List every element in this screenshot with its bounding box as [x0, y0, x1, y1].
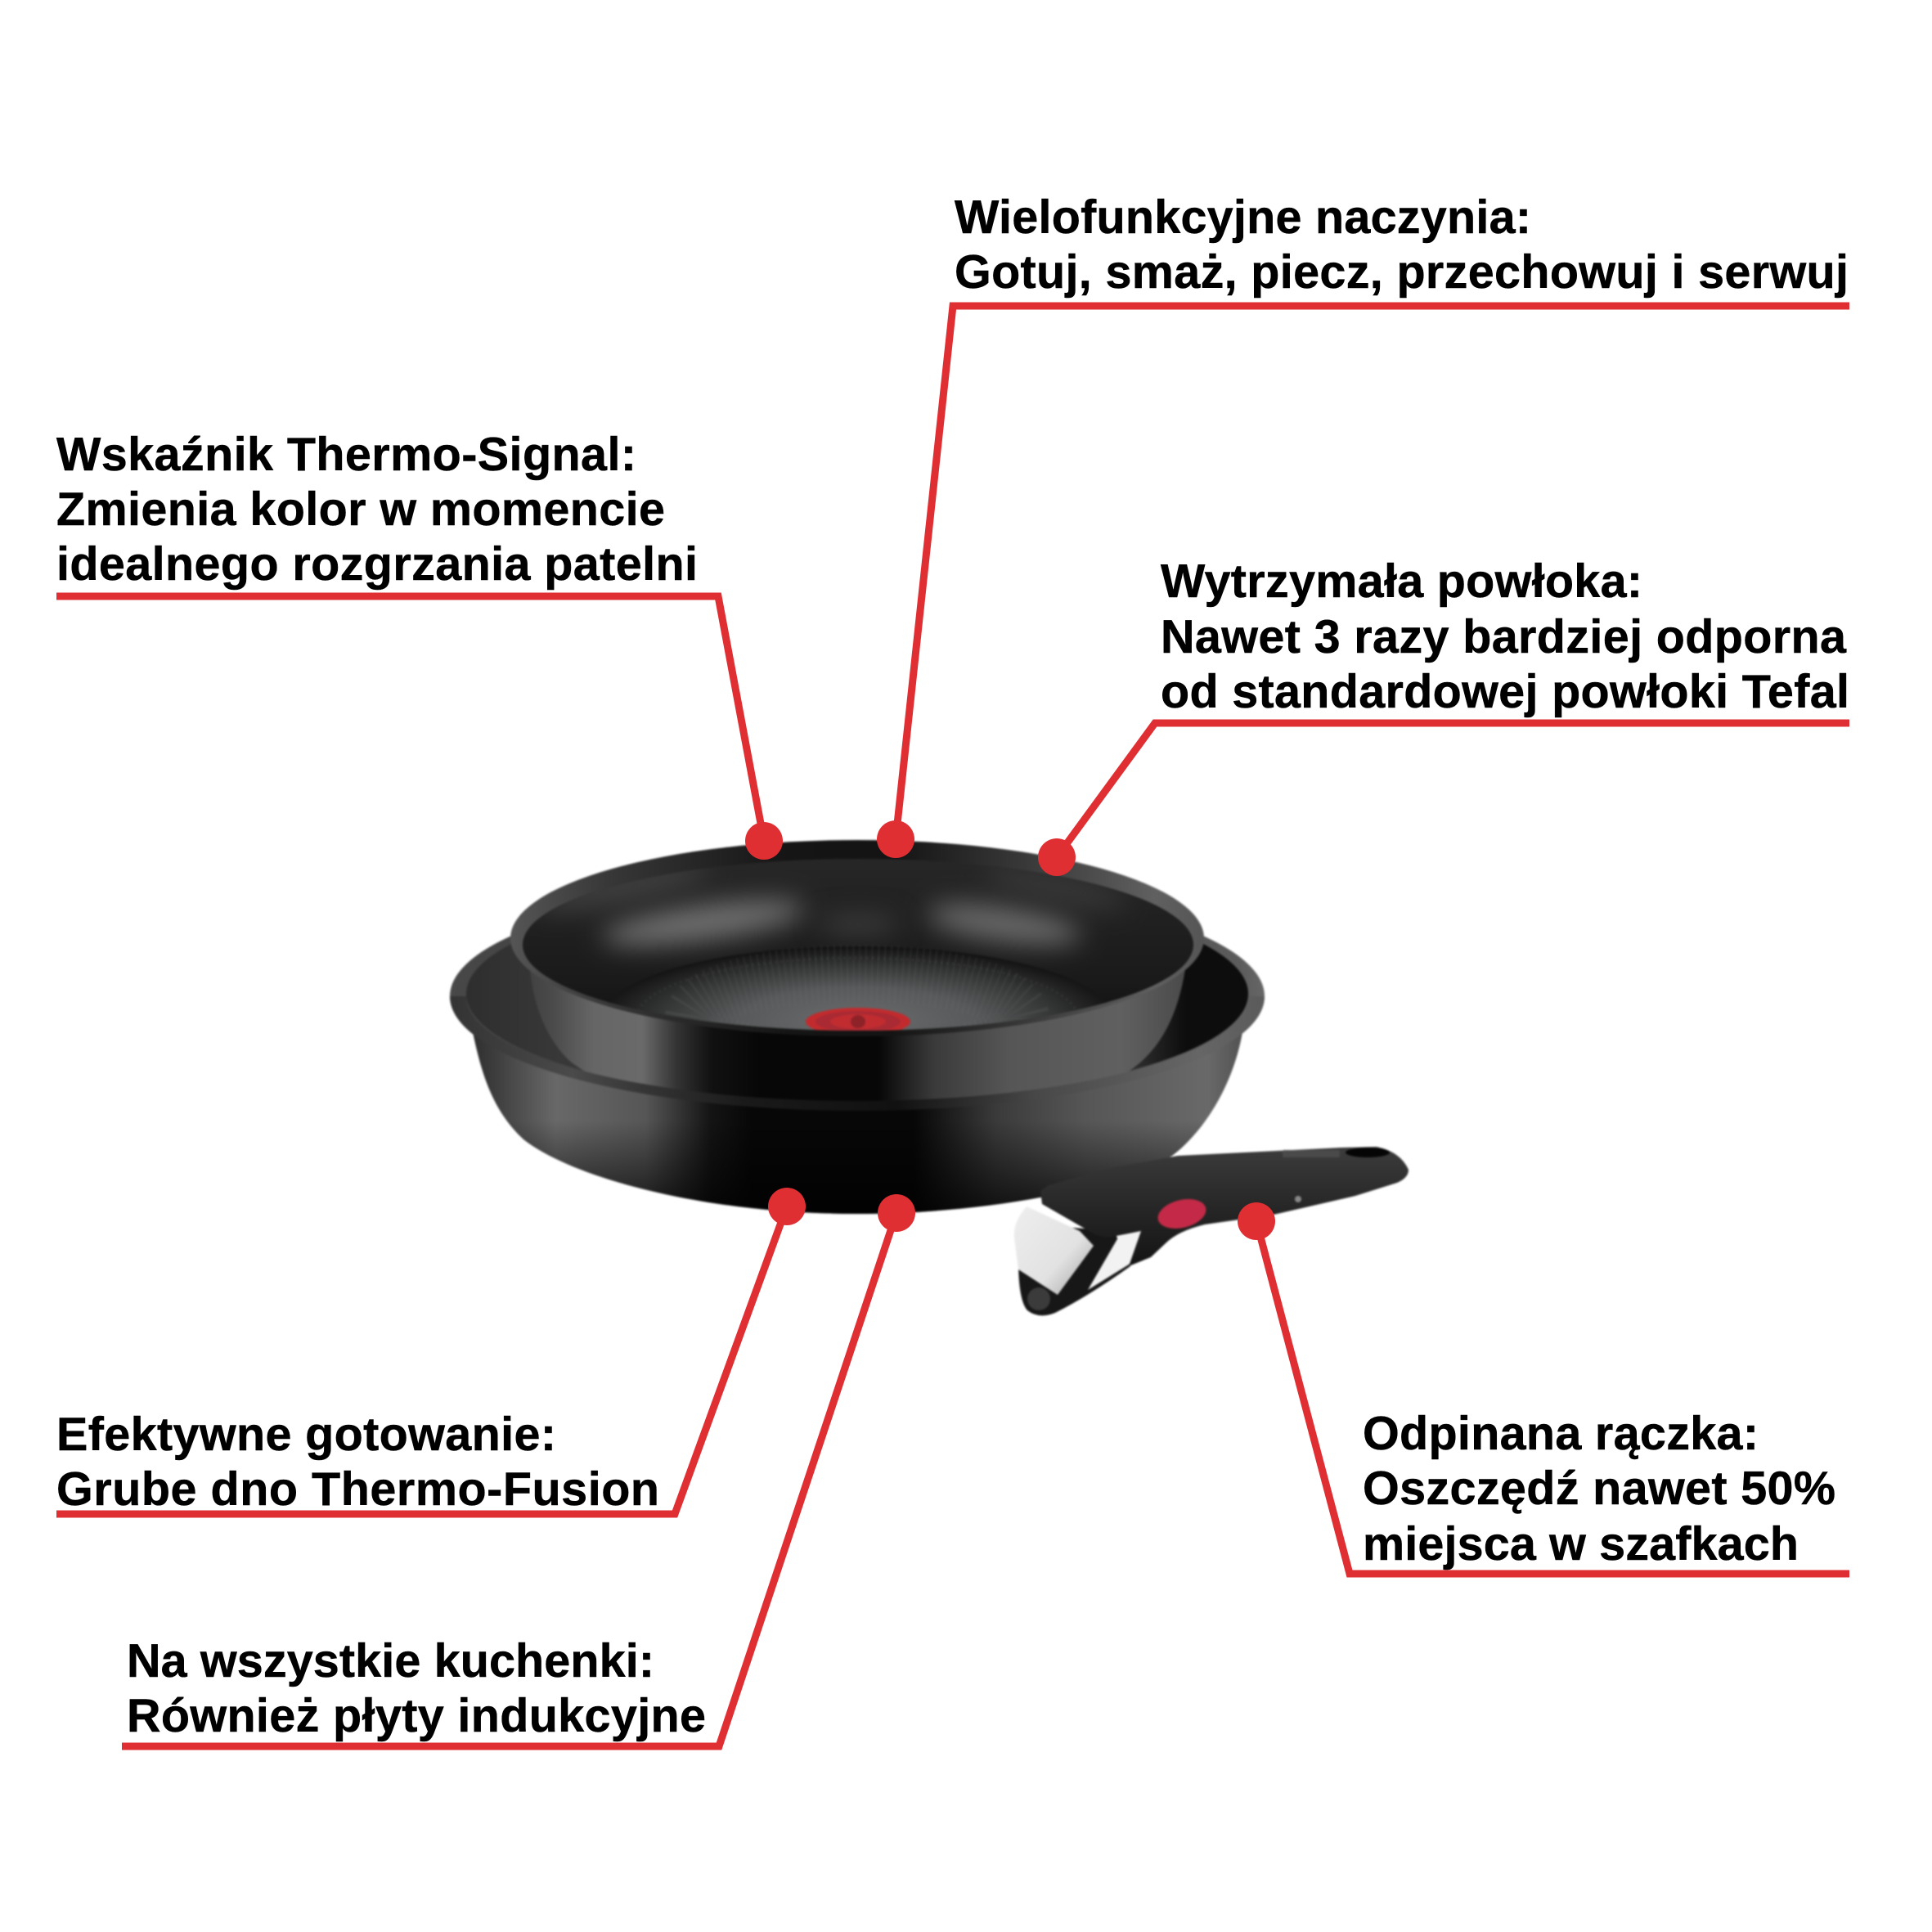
leader line — [56, 1206, 787, 1514]
marker dot — [878, 1194, 915, 1232]
description: Zmienia kolor w momencie — [56, 483, 665, 536]
handle lower cap — [1018, 1227, 1130, 1315]
description: Oszczędź nawet 50% — [1363, 1462, 1835, 1515]
leader line — [1256, 1221, 1849, 1574]
description — [56, 483, 698, 591]
description: idealnego rozgrzania patelni — [56, 538, 698, 591]
description: Grube dno Thermo-Fusion — [56, 1463, 659, 1516]
marker dot — [745, 822, 783, 860]
upper pan body — [530, 969, 1185, 1125]
lower pan back rim — [450, 882, 1265, 1111]
handle hanging hole — [1346, 1148, 1390, 1157]
callout: Efektywne gotowanie — [56, 1188, 806, 1516]
heading: Wytrzymała powłoka: — [1161, 555, 1642, 608]
description: Nawet 3 razy bardziej odporna — [1161, 611, 1847, 663]
marker dot — [877, 820, 914, 858]
leader line — [122, 1213, 896, 1746]
callout: Na wszystkie kuchenki — [122, 1194, 915, 1746]
handle logo plate — [1283, 1150, 1340, 1157]
marker dot — [1238, 1202, 1275, 1240]
upper pan rim — [510, 840, 1204, 1036]
description: miejsca w szafkach — [1363, 1518, 1799, 1570]
lower pan interior — [466, 887, 1248, 1101]
leader line — [56, 596, 764, 841]
handle grip — [1040, 1147, 1409, 1266]
heading: Wielofunkcyjne naczynia: — [955, 191, 1531, 244]
lower pan body shading — [473, 1032, 1242, 1214]
description: Gotuj, smaż, piecz, przechowuj i serwuj — [955, 246, 1849, 299]
detachable handle — [1014, 1147, 1409, 1315]
handle pivot — [1027, 1287, 1050, 1310]
handle release button — [1155, 1194, 1209, 1233]
illustration: stacked frying pans — [450, 840, 1409, 1315]
handle rivet — [1295, 1196, 1301, 1202]
callout: Odpinana rączka — [1238, 1202, 1849, 1574]
heading: Odpinana rączka: — [1363, 1408, 1759, 1460]
description — [1161, 611, 1849, 718]
description: od standardowej powłoki Tefal — [1161, 666, 1849, 718]
marker dot — [1038, 838, 1076, 876]
heading: Wskaźnik Thermo-Signal: — [56, 429, 636, 481]
callout: Wytrzymała powłoka — [1038, 555, 1849, 876]
heading: Na wszystkie kuchenki: — [127, 1635, 654, 1687]
lower pan front rim — [450, 996, 1265, 1111]
leader line — [896, 306, 1849, 839]
leader line — [1057, 723, 1849, 857]
description: Również płyty indukcyjne — [127, 1690, 706, 1742]
heading: Efektywne gotowanie: — [56, 1409, 556, 1461]
marker dot — [768, 1188, 806, 1225]
callout: Wskaźnik Thermo-Signal — [56, 429, 783, 860]
upper pan interior — [522, 859, 1194, 1031]
lower pan body — [473, 1032, 1242, 1214]
thermo-signal red disc — [806, 1008, 910, 1036]
callout: Wielofunkcyjne naczynia — [877, 191, 1849, 858]
description — [1363, 1462, 1835, 1570]
handle silver clip — [1014, 1206, 1094, 1295]
handle silver strip — [1088, 1225, 1147, 1290]
